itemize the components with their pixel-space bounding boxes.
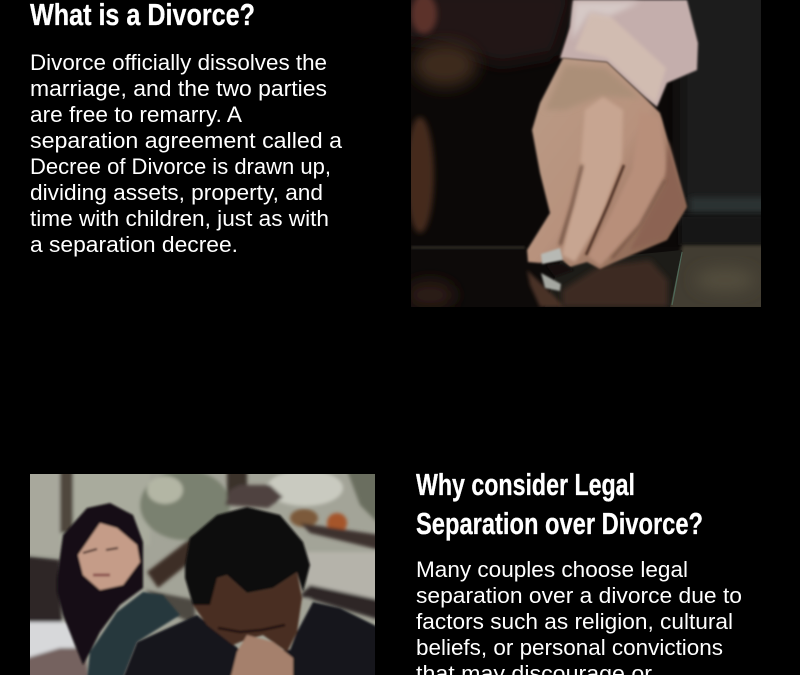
text block: divorce description: Decree of Divorce is drawn up, (30, 154, 331, 179)
photo: hand placing wedding ring on table (400, 0, 780, 310)
heading: why consider legal separation: Why consider Legal (416, 467, 635, 502)
text block: why legal separation (416, 557, 742, 675)
wrist highlight (548, 66, 632, 110)
heading: why consider legal separation (416, 467, 703, 541)
text block: why legal separation: separation over a divorce due to (416, 583, 742, 608)
text block: divorce description: a separation decree. (30, 232, 238, 257)
text block: divorce description: are free to remarry. A (30, 102, 242, 127)
fingers (562, 97, 623, 262)
heading: why consider legal separation: Separation over Divorce? (416, 506, 703, 541)
text block: divorce description: dividing assets, property, and (30, 180, 323, 205)
shirt cuff (560, 0, 698, 107)
text block: divorce description (30, 50, 343, 257)
text block: divorce description: marriage, and the two parties (30, 76, 327, 101)
reflection (527, 270, 565, 307)
woman (57, 503, 180, 675)
text block: why legal separation: Many couples choose legal (416, 557, 688, 582)
hand (527, 58, 687, 269)
photo: couple in distress (20, 465, 385, 675)
text block: why legal separation: beliefs, or personal convictions (416, 635, 723, 660)
man (122, 507, 380, 675)
text block: why legal separation: factors such as religion, cultural (416, 609, 733, 634)
ring (541, 248, 563, 264)
table surface (411, 247, 761, 307)
text block: divorce description: time with children, just as with (30, 206, 329, 231)
text block: divorce description: separation agreement called a (30, 128, 343, 153)
text block: divorce description: Divorce officially dissolves the (30, 50, 327, 75)
finger shadows (560, 165, 582, 245)
